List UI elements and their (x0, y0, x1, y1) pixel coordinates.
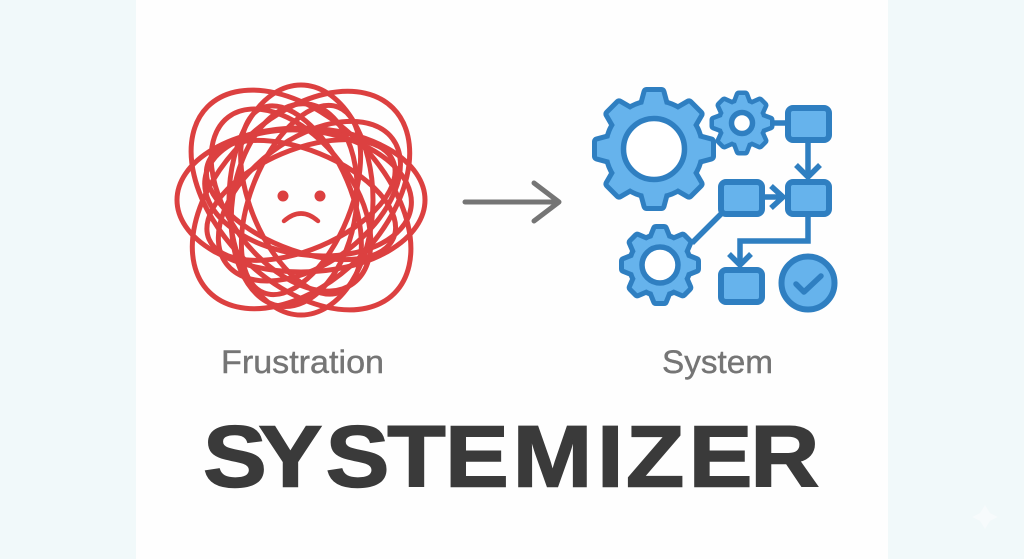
icon: tangled red loops with sad face (150, 49, 452, 351)
title: SYSTEMIZER (203, 408, 819, 506)
gear: large (597, 92, 711, 206)
label: System: System (662, 344, 773, 380)
label: Frustration: Frustration (221, 344, 384, 380)
panel: white centre (136, 0, 888, 559)
arrow: frustration to system (465, 183, 559, 221)
gear: lower left (624, 229, 696, 301)
icon: gears and flowchart system (597, 92, 834, 310)
gear: small top (714, 95, 770, 151)
flowchart boxes (721, 108, 829, 302)
connectors (692, 123, 820, 265)
icon: sparkle watermark (972, 505, 998, 529)
icon: check circle (782, 256, 834, 310)
sad face (278, 190, 326, 221)
